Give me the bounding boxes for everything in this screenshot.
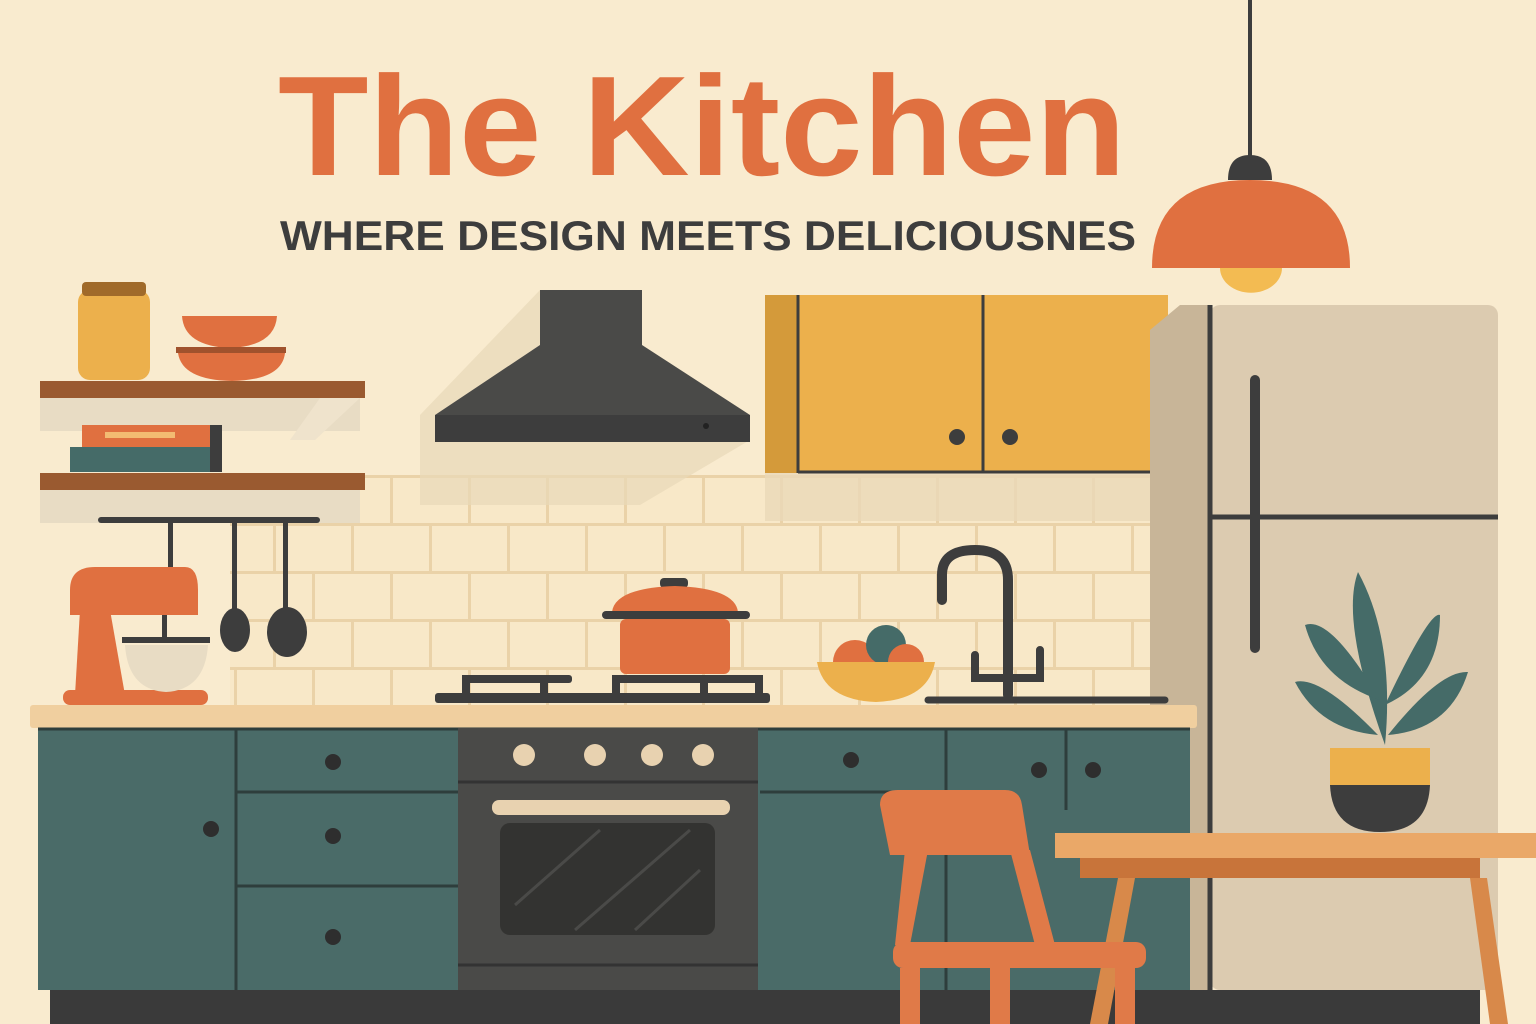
sink faucet (928, 550, 1165, 700)
burner grates (435, 675, 770, 703)
subtitle: WHERE DESIGN MEETS DELICIOUSNES (280, 212, 1136, 259)
stand mixer (63, 567, 210, 705)
chair (880, 790, 1146, 1024)
oven (458, 728, 758, 990)
pendant lamp (1152, 0, 1350, 293)
upper cabinet (765, 295, 1168, 521)
toe kick (50, 990, 1480, 1024)
shelves with jar bowls books (40, 282, 365, 523)
fruit bowl (817, 625, 935, 702)
range hood (420, 290, 750, 505)
lower cabinets (38, 728, 1190, 990)
plant (1295, 572, 1468, 832)
refrigerator (1150, 305, 1498, 990)
utensil rail (98, 517, 320, 657)
backsplash tiles (230, 475, 1150, 705)
table (1055, 833, 1536, 1024)
pot on stove (602, 578, 750, 674)
title: The Kitchen (278, 47, 1126, 206)
countertop (30, 705, 1197, 728)
